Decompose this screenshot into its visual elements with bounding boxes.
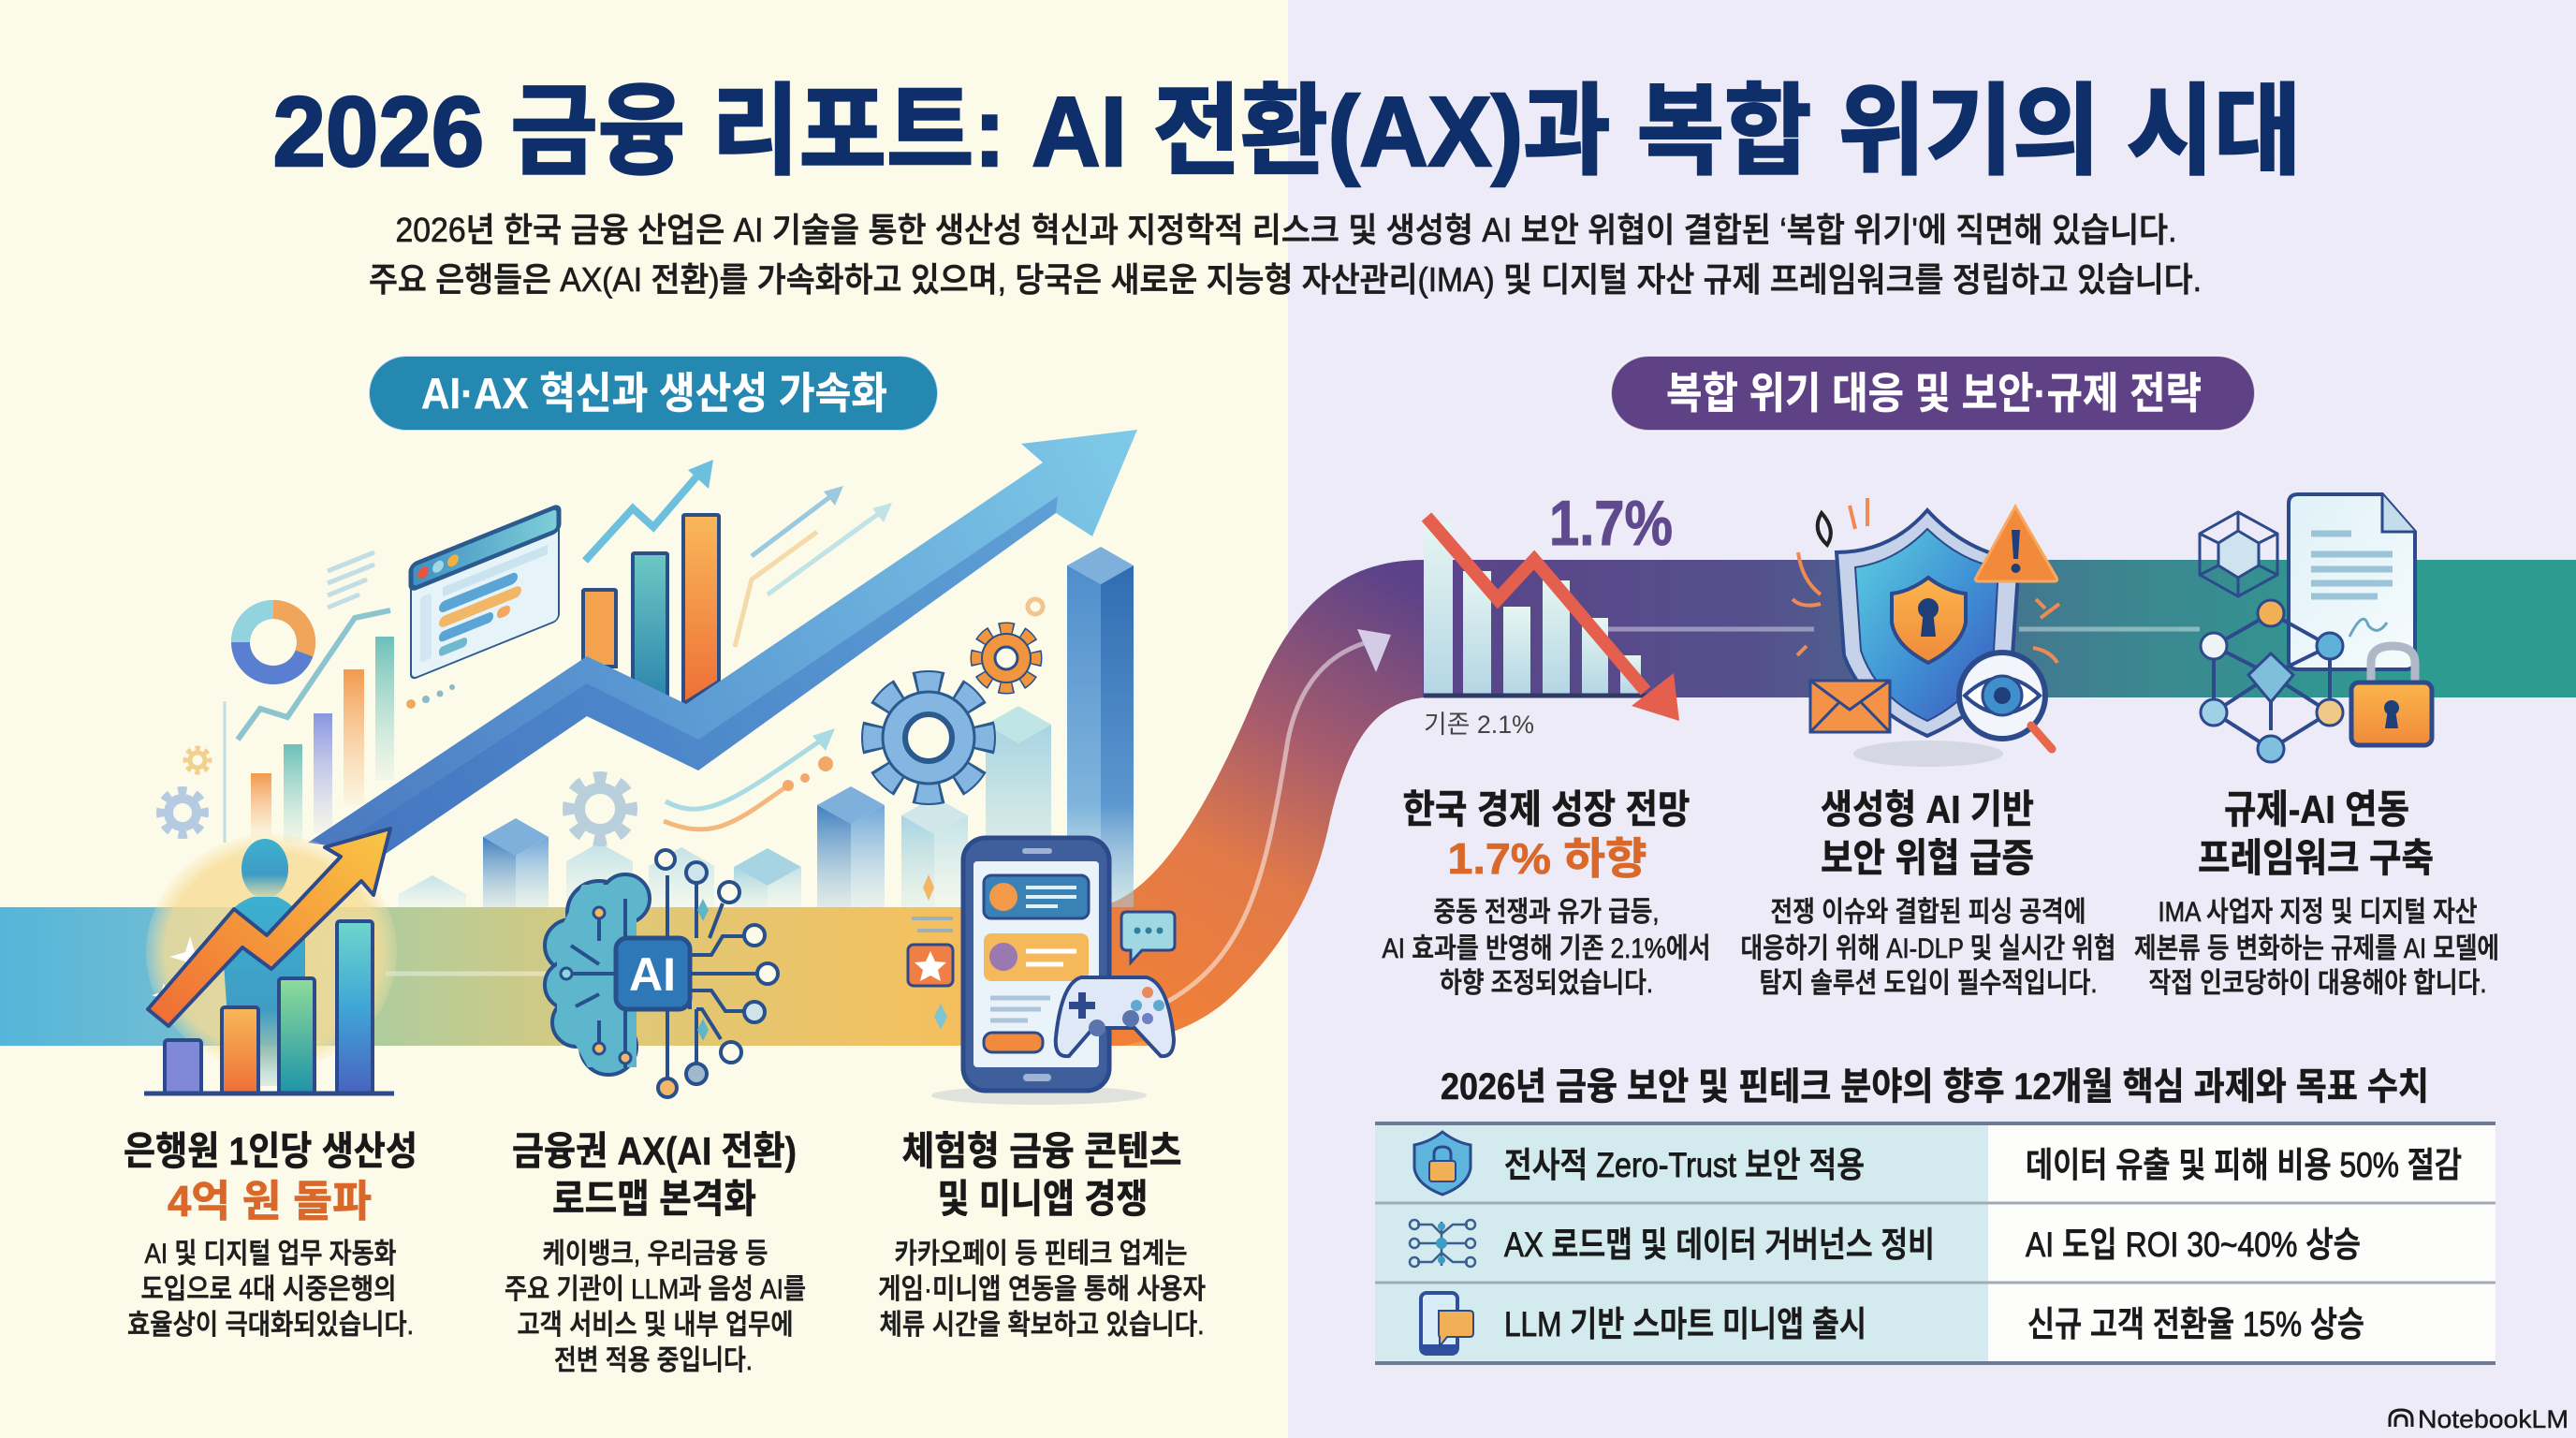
section pill: AI·AX — [369, 356, 938, 431]
row 3: LLM 기반 스마트 미니앱 출시 — [1504, 1305, 1866, 1343]
chart: growth forecast decline — [1424, 488, 1679, 739]
caption: AX roadmap — [505, 1129, 806, 1376]
previous value label: 기존 2.1% — [1424, 711, 1534, 739]
caption: regulation framework — [2134, 787, 2499, 999]
row 2: AI 도입 ROI 30~40% 상승 — [2026, 1225, 2361, 1264]
row 2 — [1410, 1220, 2361, 1267]
icon: shield lock — [1414, 1132, 1471, 1195]
icon: phone mini app with game controller — [908, 838, 1175, 1105]
caption: regulation framework: 작접 인코당하이 대용해야 합니다. — [2149, 968, 2486, 999]
caption: growth forecast: 하향 조정되었습니다. — [1440, 968, 1653, 999]
caption: productivity: 도입으로 4대 시중은행의 — [140, 1274, 397, 1305]
illustration: background growth scene — [161, 430, 1137, 907]
icon: data network — [1410, 1220, 1475, 1267]
caption: experiential contents: 및 미니앱 경쟁 — [938, 1177, 1148, 1221]
small rising arrows — [585, 460, 892, 647]
row 3 — [1421, 1293, 2364, 1354]
section pill: crisis response: 복합 위기 대응 및 보안·규제 전략 — [1666, 369, 2202, 418]
icon: productivity person with bars — [144, 829, 397, 1093]
faded left bars and trend line — [225, 610, 394, 843]
list lines — [328, 552, 374, 608]
caption: generative AI threat: 생성형 AI 기반 — [1821, 787, 2034, 831]
row 1 — [1414, 1132, 2462, 1195]
lower swoosh lines — [664, 728, 835, 829]
NotebookLM watermark: NotebookLM — [2418, 1405, 2569, 1433]
caption: experiential contents — [878, 1129, 1206, 1341]
caption: experiential contents: 카카오페이 등 핀테크 업계는 — [895, 1239, 1187, 1269]
caption: AX roadmap: 로드맵 본격화 — [552, 1177, 756, 1221]
caption: generative AI threat: 전쟁 이슈와 결합된 피싱 공격에 — [1771, 897, 2086, 928]
intro text: 2026년 한국 금융 산업은 AI 기술을 통한 생산성 혁신과 지정학적 리스크 및 생성형 AI 보안 위협이 결합된 ‘복합 위기'에 직면해 있습니다. — [395, 211, 2177, 249]
row 1: 데이터 유출 및 피해 비용 50% 절감 — [2026, 1146, 2462, 1184]
main rising arrow — [308, 430, 1137, 854]
caption: AX roadmap: 전변 적용 중입니다. — [554, 1345, 753, 1376]
caption: experiential contents: 체험형 금융 콘텐츠 — [902, 1129, 1181, 1173]
intro text — [369, 211, 2202, 299]
caption: productivity: AI 및 디지털 업무 자동화 — [144, 1239, 397, 1269]
caption: AX roadmap: 케이뱅크, 우리금융 등 — [543, 1239, 768, 1269]
isometric blocks — [399, 547, 1134, 907]
icon: phone chat — [1421, 1293, 1473, 1354]
caption: growth forecast: 한국 경제 성장 전망 — [1402, 787, 1690, 831]
icon: AI brain chip — [545, 850, 778, 1097]
caption: growth forecast: 1.7% 하향 — [1447, 834, 1647, 883]
value label: 1.7% — [1549, 488, 1673, 559]
caption: growth forecast: 중동 전쟁과 유가 급등, — [1434, 897, 1659, 928]
caption: regulation framework: IMA 사업자 지정 및 디지털 자산 — [2159, 897, 2477, 928]
flowing ribbon from AX side to crisis side — [0, 560, 2576, 1046]
icon: security shield with warning, eye, envelope — [1793, 498, 2059, 767]
caption: growth forecast: AI 효과를 반영해 기존 2.1%에서 — [1382, 933, 1711, 964]
caption: regulation framework: 제본류 등 변화하는 규제를 AI 모델에 — [2134, 933, 2499, 964]
table heading: 2026년 금융 보안 및 핀테크 분야의 향후 12개월 핵심 과제와 목표 수치 — [1441, 1066, 2429, 1108]
caption: AX roadmap: 금융권 AX(AI 전환) — [512, 1129, 797, 1173]
section pill: AI·AX: AI·AX 혁신과 생산성 가속화 — [421, 369, 887, 418]
title: 2026 금융 리포트: AI 전환(AX)과 복합 위기의 시대 — [273, 77, 2301, 187]
icon: AI brain chip: AI — [629, 948, 676, 1001]
caption: regulation framework: 프레임워크 구축 — [2198, 836, 2434, 880]
caption: regulation framework: 규제-AI 연동 — [2224, 787, 2409, 831]
gears — [161, 599, 1043, 840]
caption: experiential contents: 게임·미니앱 연동을 통해 사용자 — [878, 1274, 1206, 1305]
caption: productivity — [124, 1129, 417, 1341]
row 2: AX 로드맵 및 데이터 거버넌스 정비 — [1504, 1225, 1935, 1264]
caption: experiential contents: 체류 시간을 확보하고 있습니다. — [880, 1310, 1204, 1341]
icon: regulation document, blockchain, lock — [2200, 494, 2432, 762]
caption: growth forecast — [1382, 787, 1711, 999]
caption: productivity: 은행원 1인당 생산성 — [124, 1129, 417, 1173]
browser window — [411, 506, 559, 680]
row 1: 전사적 Zero-Trust 보안 적용 — [1504, 1146, 1865, 1184]
caption: productivity: 효율상이 극대화되있습니다. — [127, 1310, 414, 1341]
caption: AX roadmap: 주요 기관이 LLM과 음성 AI를 — [505, 1274, 806, 1305]
table: tasks and targets — [1375, 1123, 2496, 1363]
donut chart — [241, 609, 306, 675]
intro text: 주요 은행들은 AX(AI 전환)를 가속화하고 있으며, 당국은 새로운 지능형 자산관리(IMA) 및 디지털 자산 규제 프레임워크를 정립하고 있습니다. — [369, 260, 2202, 299]
outlined bars behind arrow — [583, 515, 719, 704]
section pill: crisis response — [1611, 356, 2255, 431]
caption: generative AI threat: 보안 위협 급증 — [1821, 836, 2034, 880]
caption: generative AI threat — [1741, 787, 2115, 999]
caption: generative AI threat: 탐지 솔루션 도입이 필수적입니다. — [1760, 968, 2097, 999]
window dots — [406, 684, 455, 709]
caption: generative AI threat: 대응하기 위해 AI-DLP 및 실시간 위협 — [1741, 933, 2115, 964]
caption: AX roadmap: 고객 서비스 및 내부 업무에 — [517, 1310, 794, 1341]
row 3: 신규 고객 전환율 15% 상승 — [2027, 1305, 2364, 1343]
caption: productivity: 4억 원 돌파 — [168, 1177, 372, 1225]
